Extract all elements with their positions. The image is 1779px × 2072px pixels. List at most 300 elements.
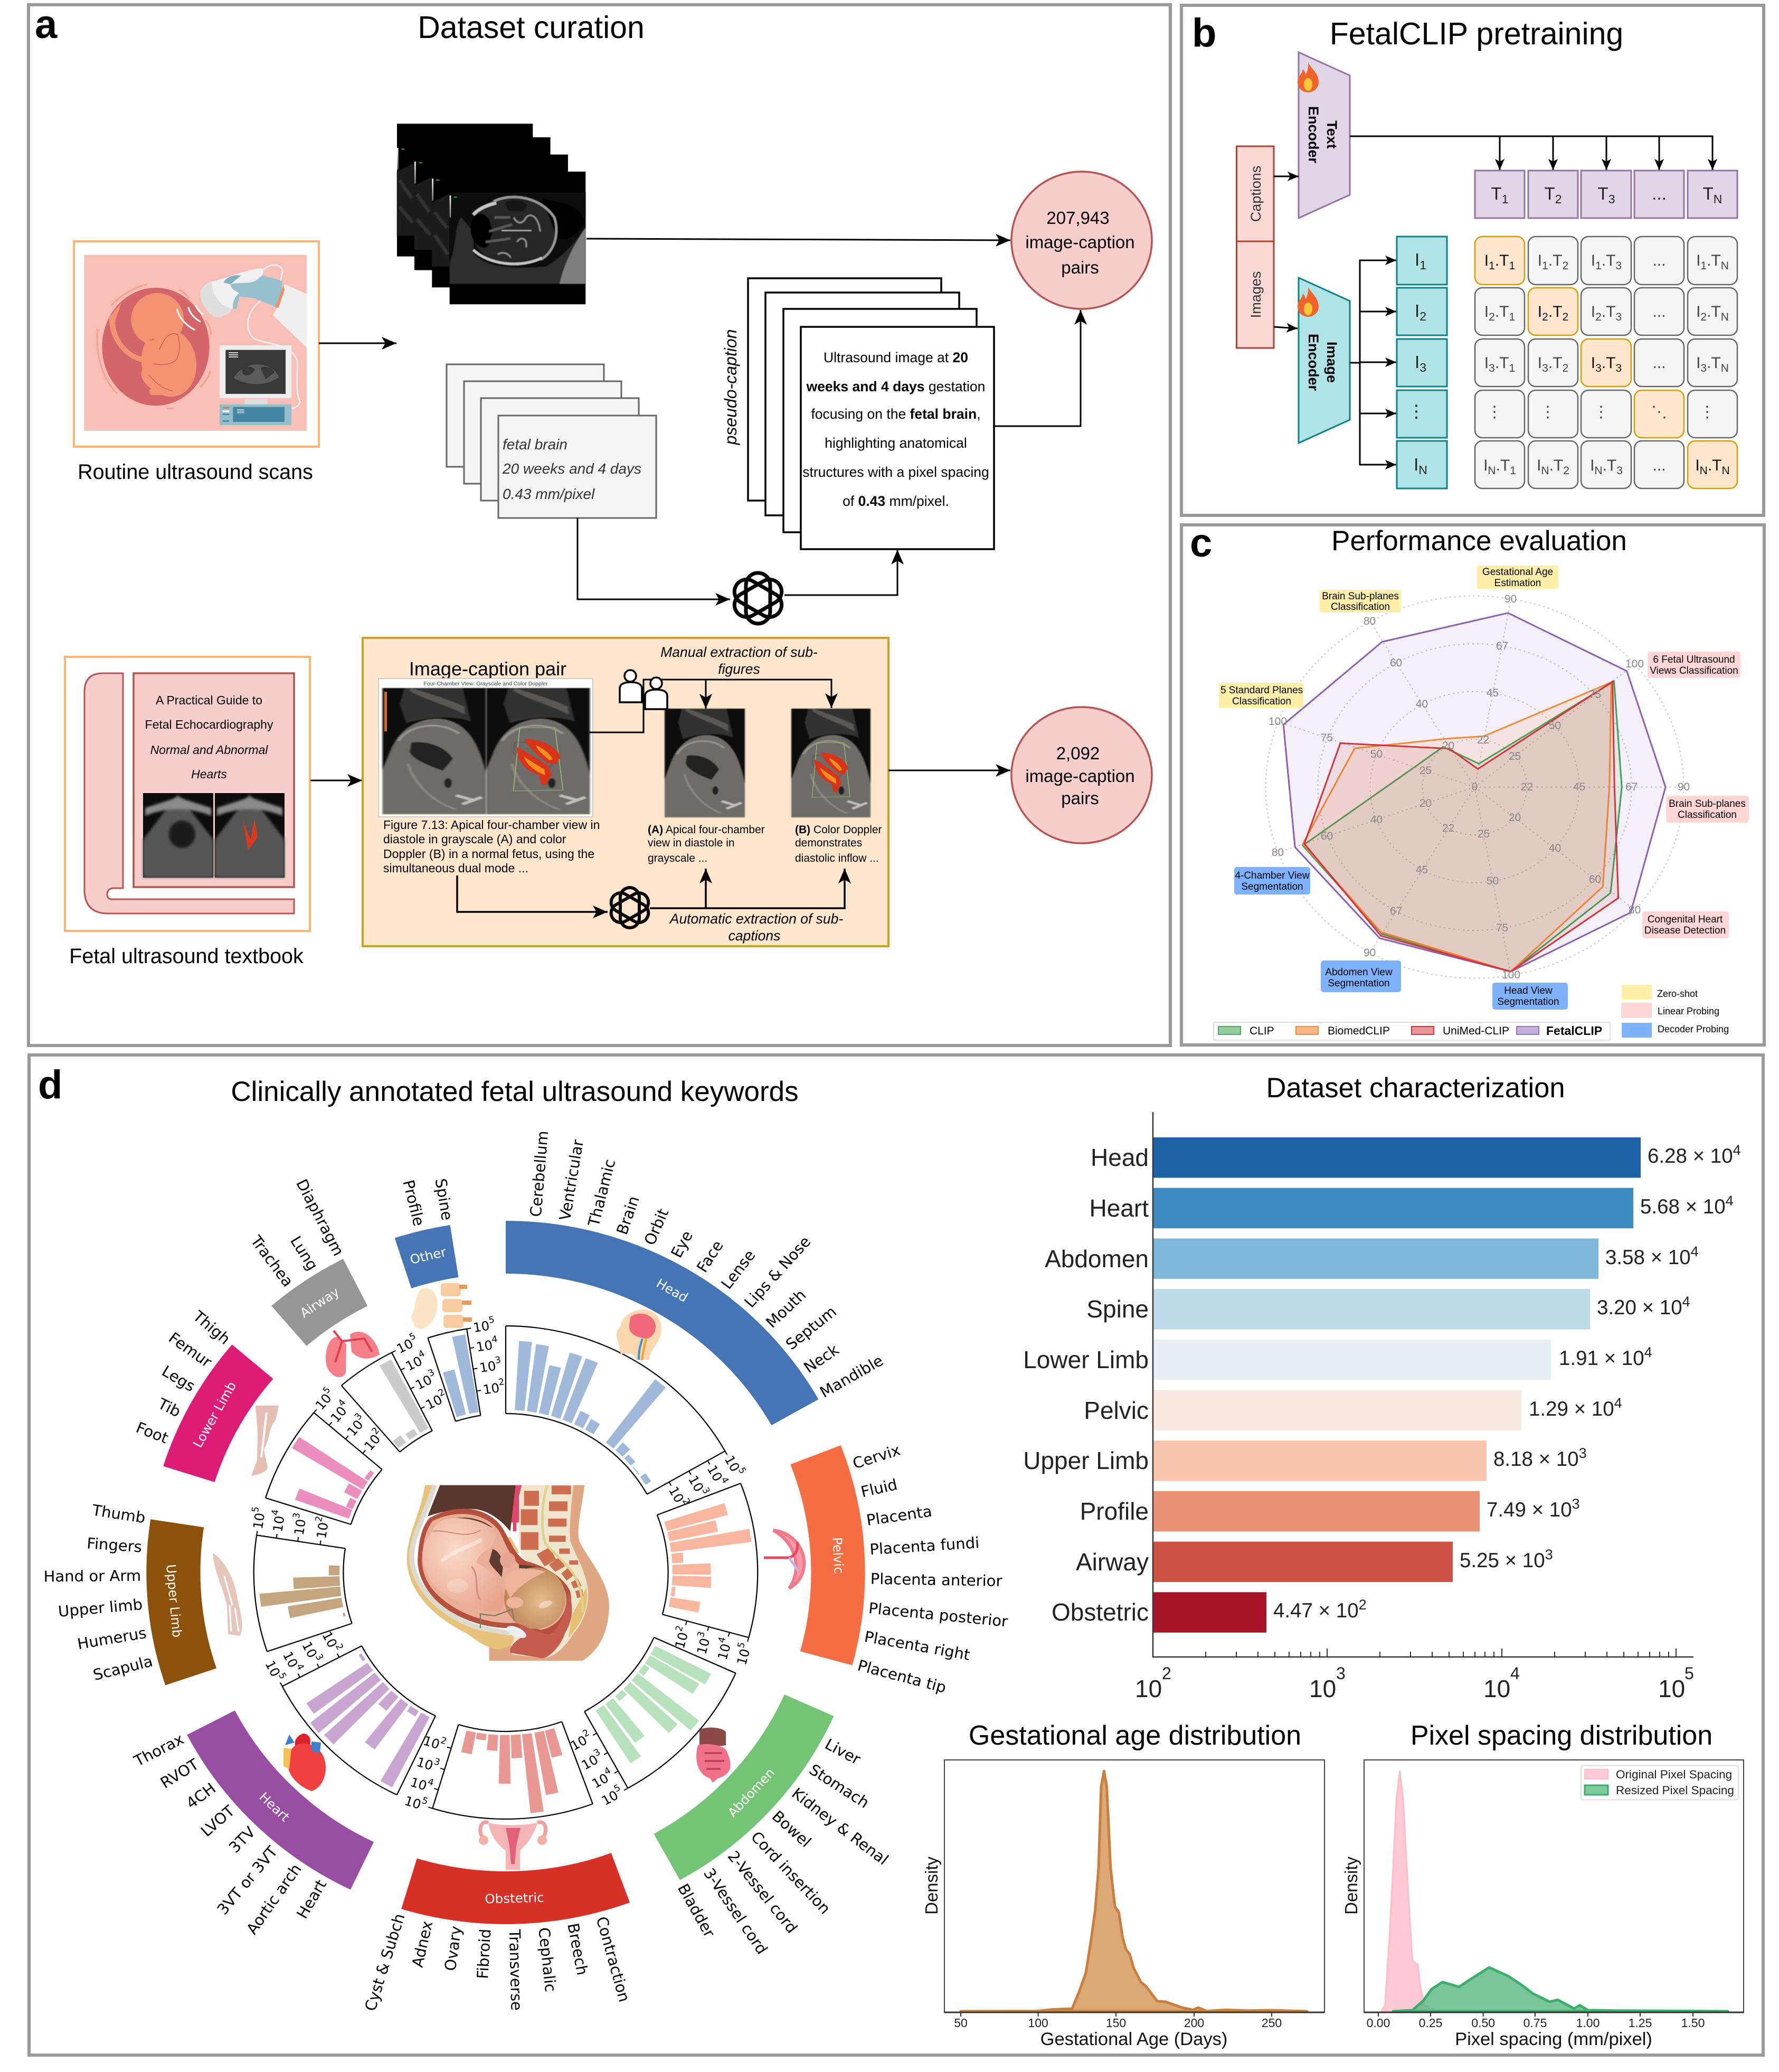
- radar tick labels: 60: [1589, 873, 1601, 886]
- log axis ticks and labels: 10: [413, 1372, 434, 1393]
- value labels: 5.25 × 10: [1460, 1549, 1545, 1572]
- keyword labels: Mouth: [762, 1286, 809, 1331]
- keyword labels: 3TV: [225, 1823, 259, 1857]
- similarity matrix: 2: [1542, 311, 1548, 323]
- keyword labels: Thigh: [189, 1307, 234, 1348]
- similarity matrix: I: [1538, 252, 1542, 269]
- image embeddings column: 3: [1420, 361, 1426, 374]
- icon: placenta: [764, 1530, 804, 1588]
- callout: 207,943 image-caption pairs: [1011, 172, 1152, 309]
- density chart: gestational age: 50: [954, 2016, 968, 2030]
- category labels: Airway: [1076, 1548, 1149, 1576]
- arrow: LLM to sub-caption A: [705, 869, 707, 908]
- keyword labels: Placenta fundi: [869, 1533, 980, 1558]
- log axis ticks and labels: 4: [417, 1349, 427, 1360]
- value labels: 1.29 × 10: [1529, 1398, 1614, 1420]
- log axis ticks and labels: 4: [270, 1509, 281, 1516]
- legend: models: [1214, 1022, 1610, 1040]
- radar tick labels: 40: [1549, 842, 1561, 854]
- log axis ticks and labels: 10: [403, 1793, 423, 1812]
- log axis ticks and labels: 2: [581, 1728, 591, 1739]
- axis labels: decoder probing tasks: Abdomen View: [1325, 967, 1393, 978]
- similarity matrix: .T: [1707, 354, 1721, 372]
- image encoder: [1298, 278, 1350, 443]
- arrows: inputs to encoders: [1274, 176, 1299, 328]
- x axis labels: 10: [1483, 1675, 1510, 1702]
- similarity matrix: ...: [1652, 303, 1666, 321]
- keyword labels: Scapula: [91, 1652, 155, 1684]
- value labels: [1273, 1142, 1741, 1622]
- heading: Dataset characterization: Dataset characterization: [1266, 1072, 1565, 1104]
- category labels: Obstetric: [1052, 1598, 1149, 1626]
- keyword labels: Placenta posterior: [868, 1599, 1009, 1631]
- x axis labels: 5: [1685, 1664, 1694, 1683]
- similarity matrix: 3: [1616, 311, 1622, 323]
- log axis ticks and labels: 10: [421, 1733, 442, 1752]
- log axis ticks and labels: 10: [694, 1636, 713, 1656]
- label: automatic extraction: Automatic extraction of sub-: [669, 911, 843, 927]
- text embeddings row: T: [1545, 184, 1555, 203]
- pseudo-caption stack: Ultrasound image at 20: [824, 350, 968, 365]
- pseudo-caption stack: structures with a pixel spacing: [802, 464, 989, 480]
- keyword labels: Thorax: [130, 1730, 187, 1770]
- panel tag c: c: [1190, 521, 1212, 566]
- x axis labels: 4: [1510, 1664, 1520, 1683]
- radar series: BiomedCLIP: [1303, 682, 1611, 972]
- legend: evaluation types: [1621, 985, 1729, 1038]
- image embeddings column: N: [1418, 463, 1427, 477]
- text embeddings row: 2: [1555, 192, 1562, 206]
- log axis ticks and labels: 3: [592, 1747, 602, 1759]
- metadata notes stack: 0.43 mm/pixel: [503, 486, 595, 502]
- band names: [163, 1244, 847, 1907]
- pseudo-caption stack: highlighting anatomical: [825, 435, 967, 451]
- similarity matrix: .T: [1495, 303, 1509, 321]
- similarity matrix: N: [1722, 465, 1730, 477]
- captions and images input: [1236, 146, 1274, 348]
- axis labels: linear probing tasks: Classification: [1678, 809, 1737, 821]
- callout: 207,943 image-caption pairs: pairs: [1061, 258, 1099, 277]
- similarity matrix: I: [1484, 303, 1489, 321]
- metadata notes stack: fetal brain: [503, 436, 567, 453]
- radar tick labels: 20: [1442, 740, 1454, 752]
- icon: digestive organs: [696, 1728, 731, 1783]
- log axis ticks and labels: 5: [736, 1466, 748, 1476]
- category labels: Profile: [1080, 1498, 1149, 1525]
- keyword labels: Bowel: [769, 1807, 815, 1851]
- log axis ticks and labels: 3: [353, 1411, 364, 1422]
- keyword labels: Neck: [800, 1341, 843, 1377]
- log axis ticks and labels: 3: [700, 1486, 712, 1496]
- radar tick labels: 22: [1477, 734, 1489, 746]
- legend: pixel spacing: Original Pixel Spacing: [1616, 1768, 1732, 1781]
- illustration: fetal ultrasound textbook: A Practical Guide to: [156, 693, 262, 707]
- axis labels: linear probing tasks: Brain Sub-planes: [1669, 798, 1746, 809]
- radar tick labels: 90: [1364, 947, 1376, 959]
- icon: heart: [283, 1734, 326, 1791]
- keyword labels: RVOT: [157, 1755, 202, 1792]
- value labels: 3: [1579, 1445, 1587, 1461]
- similarity matrix: 2: [1489, 311, 1495, 323]
- similarity matrix: I: [1484, 354, 1489, 372]
- arrow: scans to dataset: [319, 342, 396, 344]
- similarity matrix: 3: [1700, 362, 1707, 374]
- radar tick labels: 80: [1629, 904, 1641, 916]
- metadata notes stack: [447, 364, 656, 518]
- legend: models: CLIP: [1250, 1025, 1274, 1037]
- keyword labels: Cord insertion: [747, 1828, 834, 1917]
- similarity matrix: ...: [1652, 354, 1666, 372]
- similarity matrix: I: [1590, 457, 1594, 474]
- bars: lower limb: [292, 1437, 374, 1520]
- radar tick labels: 75: [1321, 732, 1333, 744]
- value labels: 3: [1545, 1547, 1553, 1562]
- radar tick labels: 67: [1390, 905, 1402, 917]
- axis labels: linear probing tasks: [1642, 652, 1749, 938]
- arrow: annotator to sub-figure A: [705, 680, 706, 709]
- radar tick labels: 25: [1478, 828, 1490, 840]
- similarity matrix: 3: [1616, 260, 1622, 272]
- category labels: Upper Limb: [1023, 1447, 1149, 1474]
- similarity matrix: ...: [1652, 252, 1666, 269]
- similarity matrix: 1: [1542, 260, 1548, 272]
- legend: evaluation types: Decoder Probing: [1658, 1024, 1729, 1034]
- x axis labels: [1135, 1664, 1694, 1702]
- keyword labels: Orbit: [640, 1206, 672, 1248]
- sub-caption A: view in diastole in: [648, 837, 735, 849]
- radar tick labels: 50: [1370, 748, 1383, 760]
- radar tick labels: 50: [1549, 720, 1561, 732]
- category labels: Spine: [1086, 1295, 1149, 1323]
- axis labels: decoder probing tasks: Segmentation: [1328, 978, 1390, 989]
- similarity matrix: I: [1591, 354, 1595, 372]
- label: automatic extraction: captions: [728, 928, 780, 944]
- category labels: Heart: [1090, 1194, 1149, 1222]
- log axis ticks and labels: 4: [716, 1636, 728, 1644]
- log axis ticks and labels: 4: [427, 1777, 435, 1788]
- stack of ultrasound frames: [397, 124, 585, 304]
- axes: [1153, 1112, 1693, 1657]
- similarity matrix: .T: [1548, 303, 1563, 321]
- value labels: 4: [1644, 1344, 1652, 1360]
- keyword labels: 3-Vessel cord: [700, 1865, 771, 1957]
- radar grid: [1266, 596, 1684, 978]
- radar tick labels: 100: [1625, 658, 1644, 670]
- label: manual extraction: Manual extraction of sub-: [660, 644, 818, 660]
- arrow: extraction to pair count: [888, 770, 1010, 771]
- text embeddings row: 1: [1502, 192, 1508, 206]
- text encoder: Encoder: [1305, 106, 1321, 164]
- log axis ticks and labels: 3: [291, 1512, 302, 1519]
- radar series: CLIP: [1303, 681, 1622, 972]
- axis labels: decoder probing tasks: Segmentation: [1497, 996, 1559, 1007]
- value labels: 7.49 × 10: [1487, 1499, 1572, 1521]
- radar tick labels: 90: [1504, 593, 1517, 605]
- sub-caption A: grayscale ...: [648, 852, 707, 864]
- similarity matrix: 3: [1595, 362, 1602, 374]
- similarity matrix: .T: [1708, 457, 1722, 474]
- icon: LLM knot small: [608, 888, 652, 928]
- keyword labels: Cyst & Subch: [361, 1911, 409, 2013]
- band names: Pelvic: [829, 1537, 847, 1574]
- callout: 2,092 image-caption pairs: image-caption: [1025, 766, 1135, 786]
- similarity matrix: 1: [1595, 260, 1602, 272]
- keyword labels: Placenta: [865, 1502, 933, 1529]
- icon: uterus: [479, 1822, 547, 1870]
- value labels: 4: [1733, 1142, 1741, 1158]
- log axis ticks and labels: 10: [314, 1521, 331, 1540]
- label: manual extraction: [660, 644, 818, 677]
- heading: clinically annotated keywords: Clinically annotated fetal ultrasound keywords: [231, 1076, 799, 1107]
- log axis ticks and labels: 10: [714, 1642, 734, 1662]
- legend: models: UniMed-CLIP: [1443, 1025, 1509, 1037]
- axis labels: decoder probing tasks: [1234, 867, 1568, 1010]
- bars: [1153, 1137, 1641, 1633]
- density chart: pixel spacing: Density: [1341, 1856, 1361, 1915]
- keyword labels: 3VT or 3VT: [213, 1842, 281, 1918]
- band names: Obstetric: [485, 1890, 544, 1907]
- figure caption: diastole in grayscale (A) and color: [383, 832, 566, 846]
- image embeddings column: 2: [1420, 309, 1426, 323]
- keyword labels: Humerus: [76, 1624, 148, 1653]
- density chart: gestational age: [922, 1760, 1324, 2049]
- similarity matrix: .T: [1707, 303, 1721, 321]
- arrow: frames to pair count: [586, 239, 1010, 240]
- radar tick labels: 40: [1370, 814, 1383, 826]
- density chart: pixel spacing: 0.00: [1367, 2016, 1390, 2030]
- radar tick labels: 45: [1487, 687, 1499, 699]
- similarity matrix: I: [1484, 252, 1489, 269]
- log axis ticks and labels: 10: [599, 1787, 621, 1809]
- text encoder: Text: [1324, 120, 1340, 149]
- callout: 2,092 image-caption pairs: pairs: [1061, 788, 1099, 808]
- similarity matrix: .T: [1707, 252, 1721, 269]
- log axis ticks and labels: 10: [685, 1473, 707, 1494]
- x axis labels: 3: [1336, 1664, 1346, 1683]
- x axis labels: 10: [1309, 1675, 1336, 1702]
- pseudo-caption stack: of 0.43 mm/pixel.: [843, 493, 949, 509]
- similarity matrix: N: [1700, 465, 1708, 477]
- log axis ticks and labels: 2: [333, 1642, 345, 1652]
- keyword labels: Spine: [432, 1177, 457, 1221]
- similarity matrix: N: [1721, 311, 1729, 323]
- density chart: pixel spacing: Pixel spacing (mm/pixel): [1455, 2029, 1652, 2049]
- arrow: notes to LLM: [578, 518, 730, 599]
- x axis labels: 10: [1135, 1675, 1162, 1702]
- similarity matrix: I: [1696, 354, 1700, 372]
- log axis ticks and labels: 10: [672, 1631, 691, 1650]
- keyword labels: Hand or Arm: [43, 1567, 141, 1585]
- panel tag a: a: [35, 2, 58, 47]
- icon: LLM knot: [730, 573, 786, 624]
- log axis ticks and labels: 2: [680, 1496, 692, 1506]
- text embeddings row: T: [1703, 184, 1714, 203]
- arrow: LLM to pseudo-captions: [784, 550, 897, 595]
- sub-caption A: [648, 824, 765, 864]
- log axis ticks and labels: 3: [433, 1756, 441, 1768]
- log axis ticks and labels: 5: [736, 1641, 747, 1649]
- legend: pixel spacing: [1581, 1766, 1738, 1800]
- arrow: caption to LLM: [457, 875, 608, 912]
- keyword labels: Liver: [822, 1735, 864, 1768]
- value labels: 4: [1691, 1244, 1699, 1259]
- figure caption: Doppler (B) in a normal fetus, using the: [383, 847, 594, 861]
- keyword labels: LVOT: [197, 1802, 238, 1840]
- density chart: pixel spacing: 0.25: [1419, 2016, 1442, 2030]
- similarity matrix: I: [1538, 354, 1542, 372]
- keyword labels: Placenta anterior: [870, 1570, 1002, 1590]
- panel c: performance evaluation: [1181, 521, 1764, 1045]
- similarity matrix: I: [1695, 457, 1700, 474]
- axis labels: linear probing tasks: Congenital Heart: [1648, 914, 1723, 925]
- log axis ticks and labels: 2: [314, 1515, 325, 1522]
- radar tick labels: 0: [1472, 781, 1478, 793]
- log axis ticks and labels: 10: [722, 1453, 743, 1474]
- textbook figure: [378, 679, 593, 817]
- density chart: pixel spacing: 1.25: [1629, 2016, 1652, 2030]
- keyword labels: Cephalic: [535, 1927, 560, 1993]
- image embeddings column: I: [1414, 455, 1418, 474]
- axis labels: zero-shot tasks: 5 Standard Planes: [1220, 685, 1303, 696]
- axis labels: zero-shot tasks: Classification: [1331, 601, 1390, 613]
- similarity matrix: .T: [1549, 457, 1563, 474]
- image embeddings column: [1397, 237, 1447, 488]
- density chart: gestational age: 150: [1106, 2016, 1126, 2030]
- radar tick labels: 100: [1269, 715, 1287, 728]
- bars: heart: [306, 1653, 431, 1787]
- log axis ticks and labels: 10: [423, 1392, 444, 1412]
- log axis ticks and labels: 10: [344, 1417, 366, 1439]
- similarity matrix: 2: [1700, 311, 1707, 323]
- similarity matrix: 2: [1563, 311, 1568, 323]
- legend: models: BiomedCLIP: [1328, 1025, 1390, 1037]
- axis labels: decoder probing tasks: Head View: [1504, 985, 1553, 996]
- similarity matrix: I: [1483, 457, 1488, 474]
- radar tick labels: 22: [1442, 822, 1454, 834]
- image embeddings column: ⋮: [1407, 401, 1425, 421]
- icon: annotators: [620, 670, 667, 709]
- panel a: dataset curation: [29, 2, 1170, 1046]
- x axis labels: 2: [1162, 1664, 1171, 1683]
- log axis ticks and labels: 10: [250, 1512, 268, 1530]
- similarity matrix: ⋮: [1540, 403, 1556, 421]
- radar tick labels: 25: [1420, 765, 1432, 777]
- log axis ticks and labels: 10: [472, 1318, 490, 1335]
- sub-caption B: [795, 824, 882, 864]
- similarity matrix: ⋮: [1699, 403, 1715, 421]
- similarity matrix: .T: [1548, 354, 1563, 372]
- band names: Abdomen: [724, 1765, 778, 1820]
- radar tick labels: 80: [1272, 846, 1284, 859]
- radar tick labels: 25: [1509, 750, 1521, 762]
- log axis ticks and labels: 3: [494, 1355, 501, 1366]
- keyword labels: 4CH: [183, 1779, 219, 1812]
- similarity matrix: I: [1696, 252, 1700, 269]
- similarity matrix: I: [1537, 457, 1541, 474]
- sub-caption B: demonstrates: [795, 837, 862, 849]
- image embeddings column: I: [1415, 250, 1420, 269]
- log axis ticks and labels: 10: [734, 1647, 753, 1666]
- image embeddings column: I: [1415, 301, 1420, 321]
- log axis ticks and labels: 2: [674, 1624, 686, 1633]
- bars: abdomen: [594, 1645, 711, 1763]
- axis labels: zero-shot tasks: Gestational Age: [1482, 567, 1553, 578]
- bars: upper limb: [260, 1565, 346, 1618]
- value labels: 8.18 × 10: [1493, 1448, 1579, 1471]
- keyword labels: Thalamic: [584, 1157, 619, 1229]
- similarity matrix: .T: [1602, 252, 1616, 269]
- keyword labels: Fluid: [859, 1475, 899, 1501]
- log axis ticks and labels: 5: [250, 1506, 261, 1513]
- radar tick labels: 45: [1573, 781, 1585, 793]
- density chart: gestational age: Density: [922, 1856, 941, 1915]
- heading: Gestational age distribution: Gestational age distribution: [969, 1720, 1301, 1751]
- log axis ticks and labels: 5: [421, 1795, 429, 1807]
- sub-figure B: [791, 709, 870, 817]
- keyword labels: Upper limb: [58, 1595, 143, 1621]
- keyword labels: Kidney & Renal: [788, 1784, 892, 1869]
- callout: 2,092 image-caption pairs: [1011, 707, 1152, 843]
- radar tick labels: 67: [1625, 781, 1638, 793]
- radar tick labels: 50: [1487, 875, 1499, 887]
- panel: image-caption pair extraction: [363, 638, 888, 946]
- similarity matrix: N: [1541, 465, 1549, 477]
- log axis ticks and labels: 10: [319, 1629, 340, 1650]
- heading: FetalCLIP pretraining: FetalCLIP pretraining: [1330, 16, 1623, 51]
- text embeddings row: T: [1491, 184, 1502, 203]
- log axis ticks and labels: 3: [696, 1631, 707, 1638]
- log axis ticks and labels: 10: [270, 1515, 288, 1533]
- log axis ticks and labels: 10: [327, 1404, 350, 1425]
- radar tick labels: 40: [1416, 698, 1428, 710]
- sub-caption B: diastolic inflow ...: [795, 852, 879, 864]
- similarity matrix: 1: [1700, 260, 1707, 272]
- axis labels: zero-shot tasks: Estimation: [1494, 578, 1541, 589]
- category labels: Pelvic: [1084, 1397, 1149, 1424]
- log axis ticks and labels: 4: [718, 1475, 731, 1485]
- axis labels: decoder probing tasks: Segmentation: [1241, 881, 1303, 892]
- text encoder: [1298, 52, 1350, 218]
- log axis ticks and labels: 10: [262, 1658, 283, 1679]
- radar tick labels: 75: [1589, 689, 1601, 701]
- figure caption: [383, 818, 600, 875]
- icon: head and brain: [616, 1310, 661, 1360]
- heading: Performance evaluation: Performance evaluation: [1331, 525, 1627, 557]
- value labels: 2: [1359, 1597, 1367, 1613]
- band names: Lower Limb: [190, 1379, 240, 1450]
- image embeddings column: I: [1415, 352, 1420, 372]
- radar tick labels: 100: [1502, 969, 1520, 981]
- log axis ticks and labels: 10: [291, 1518, 309, 1536]
- similarity matrix: .T: [1496, 457, 1510, 474]
- density chart: pixel spacing: 1.00: [1576, 2016, 1600, 2030]
- text embeddings row: T: [1598, 184, 1608, 203]
- similarity matrix: 1: [1509, 362, 1515, 374]
- text embeddings row: 3: [1608, 192, 1615, 206]
- density chart: gestational age: Gestational Age (Days): [1040, 2029, 1227, 2049]
- circular keyword chart: [37, 1114, 1009, 2031]
- arrow: textbook to pair extraction: [310, 779, 362, 781]
- density chart: gestational age: 250: [1262, 2016, 1282, 2030]
- radar tick labels: 60: [1390, 657, 1402, 669]
- captions and images input: Images: [1248, 271, 1264, 318]
- band names: Airway: [297, 1284, 342, 1321]
- log axis ticks and labels: 10: [415, 1754, 435, 1773]
- similarity matrix: 3: [1616, 465, 1623, 477]
- category labels: [1023, 1144, 1149, 1626]
- similarity matrix: N: [1721, 260, 1729, 272]
- bars: other: [443, 1334, 480, 1417]
